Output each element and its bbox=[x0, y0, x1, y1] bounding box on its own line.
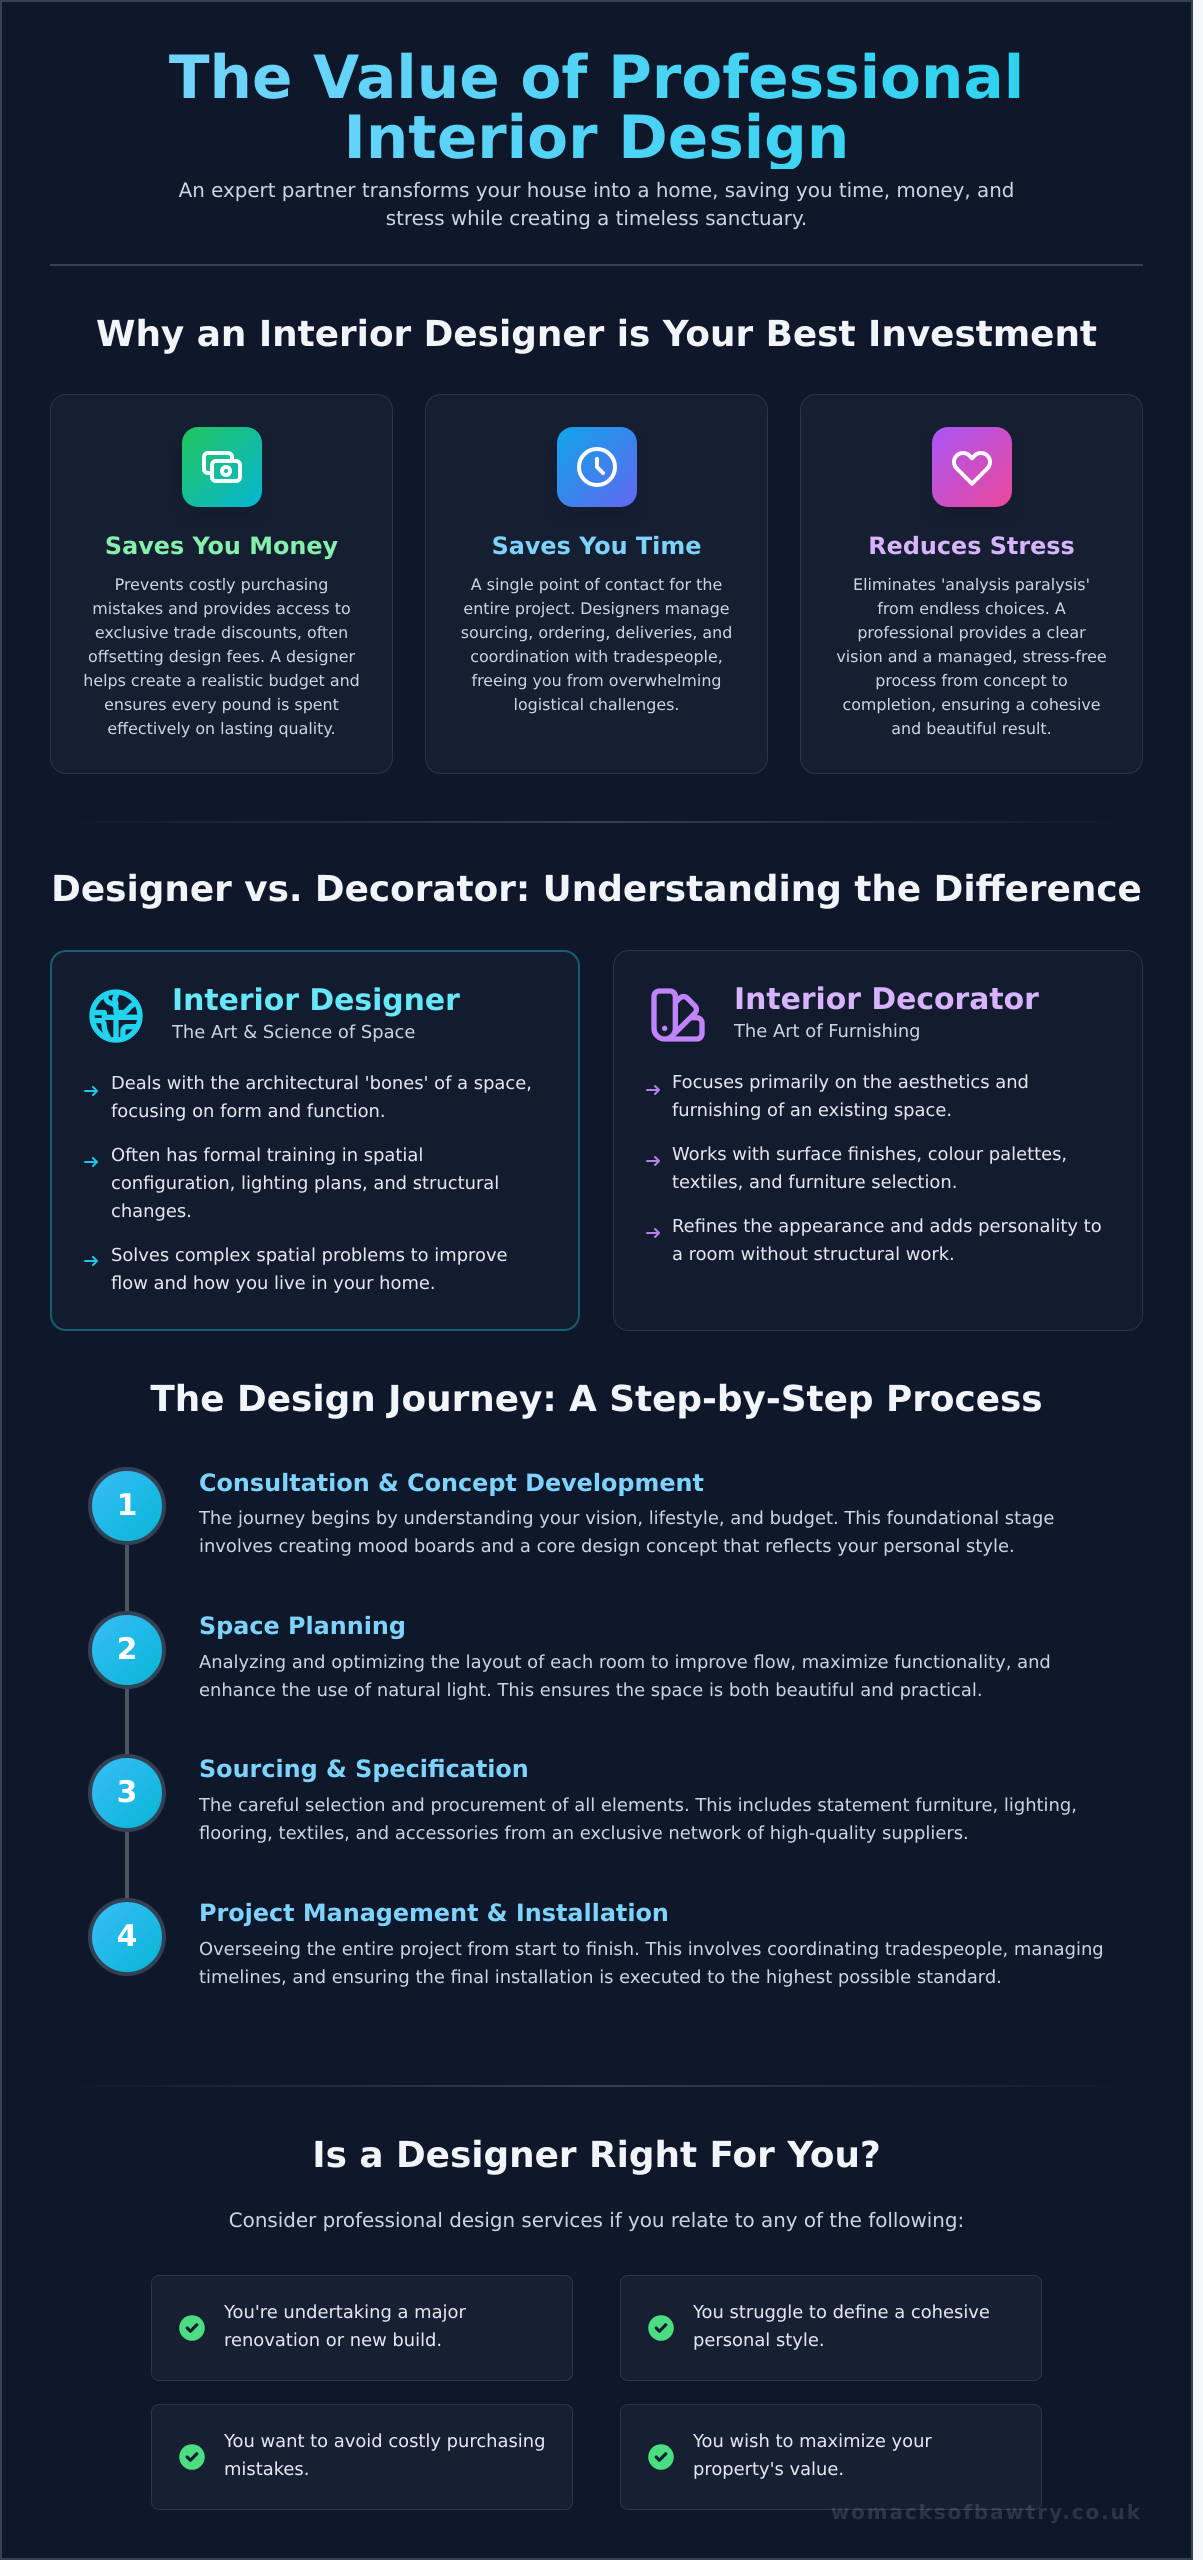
checklist item 3 bbox=[151, 2404, 573, 2510]
icon: money bbox=[182, 427, 262, 507]
step 3 text: flooring, textiles, and accessories from an exclusive network of high-quality suppliers. bbox=[199, 1823, 969, 1844]
arrow bbox=[84, 1086, 98, 1096]
arrow bbox=[84, 1157, 98, 1167]
bullet: Deals with the architectural 'bones' of a space, bbox=[111, 1073, 532, 1094]
card text: logistical challenges. bbox=[514, 695, 679, 714]
step 4 text bbox=[199, 1938, 1104, 1988]
bullet: Solves complex spatial problems to improve bbox=[111, 1245, 508, 1266]
title: The Value of Professional bbox=[169, 44, 1024, 113]
decorator subtitle: The Art of Furnishing bbox=[734, 1021, 921, 1042]
bullet bbox=[111, 1145, 499, 1222]
step 2 marker bbox=[88, 1610, 166, 1688]
bullet: textiles, and furniture selection. bbox=[672, 1172, 957, 1193]
bullet bbox=[111, 1073, 532, 1122]
step 1 text: involves creating mood boards and a core design concept that reflects your personal style. bbox=[199, 1536, 1015, 1557]
bullet: a room without structural work. bbox=[672, 1244, 955, 1264]
subtitle bbox=[178, 179, 1014, 230]
connector bbox=[125, 1832, 129, 1899]
item text: You're undertaking a major bbox=[224, 2302, 466, 2323]
connector bbox=[125, 1545, 129, 1612]
icon: check bbox=[648, 2444, 674, 2470]
icon: check bbox=[179, 2444, 205, 2470]
arrow bbox=[84, 1256, 98, 1266]
bullet: Refines the appearance and adds personality to bbox=[672, 1216, 1102, 1236]
card text bbox=[83, 575, 360, 738]
arrow bbox=[646, 1085, 660, 1095]
card heading: Reduces Stress bbox=[868, 532, 1075, 560]
bullet: configuration, lighting plans, and structural bbox=[111, 1173, 499, 1194]
card text: freeing you from overwhelming bbox=[472, 671, 721, 690]
icon: swatch bbox=[651, 988, 705, 1042]
card text: effectively on lasting quality. bbox=[107, 719, 336, 738]
watermark: womacksofbawtry.co.uk bbox=[831, 2501, 1142, 2524]
checklist item 4 bbox=[620, 2404, 1042, 2510]
card text: vision and a managed, stress-free bbox=[836, 647, 1107, 666]
designer heading: Interior Designer bbox=[172, 983, 460, 1018]
designer subtitle: The Art & Science of Space bbox=[172, 1022, 415, 1043]
card text: coordination with tradespeople, bbox=[470, 647, 723, 666]
title bbox=[50, 49, 1143, 169]
bullet: Works with surface finishes, colour palettes, bbox=[672, 1144, 1067, 1165]
bullet: changes. bbox=[111, 1201, 192, 1222]
item text: renovation or new build. bbox=[224, 2330, 442, 2351]
checklist item 1 bbox=[151, 2275, 573, 2381]
card text: Eliminates 'analysis paralysis' bbox=[853, 575, 1090, 594]
item text bbox=[693, 2431, 932, 2480]
icon: check bbox=[648, 2315, 674, 2341]
step 4 marker bbox=[88, 1898, 166, 1976]
card text: and beautiful result. bbox=[891, 719, 1052, 738]
step 2 text: enhance the use of natural light. This ensures the space is both beautiful and practical. bbox=[199, 1680, 983, 1700]
step 2 text bbox=[199, 1652, 1051, 1700]
card text: Prevents costly purchasing bbox=[115, 575, 328, 594]
step 3 text: The careful selection and procurement of all elements. This includes statement furniture, lighting, bbox=[199, 1795, 1077, 1816]
item text bbox=[224, 2431, 545, 2480]
panel: interior designer bbox=[50, 950, 580, 1331]
item text bbox=[224, 2302, 466, 2351]
card heading: Saves You Time bbox=[492, 532, 701, 560]
bullet: Often has formal training in spatial bbox=[111, 1145, 423, 1166]
panel: saves time bbox=[425, 394, 768, 774]
card text: offsetting design fees. A designer bbox=[88, 647, 355, 666]
bullet bbox=[672, 1072, 1029, 1121]
bullet bbox=[672, 1216, 1102, 1264]
step 3 title: Sourcing & Specification bbox=[199, 1755, 529, 1783]
heading: right for you: Is a Designer Right For You? bbox=[312, 2135, 881, 2176]
step 1 marker: 1 bbox=[117, 1488, 137, 1523]
card text: exclusive trade discounts, often bbox=[95, 623, 348, 642]
step 2 text: Analyzing and optimizing the layout of each room to improve flow, maximize functionality, and bbox=[199, 1652, 1051, 1672]
panel: saves money bbox=[50, 394, 393, 774]
bullet: Focuses primarily on the aesthetics and bbox=[672, 1072, 1029, 1093]
checklist item 2 bbox=[620, 2275, 1042, 2381]
step 4 marker: 4 bbox=[117, 1918, 137, 1954]
card text: professional provides a clear bbox=[857, 623, 1086, 642]
bullet: furnishing of an existing space. bbox=[672, 1100, 952, 1121]
panel: interior decorator bbox=[613, 950, 1143, 1331]
step 3 text bbox=[198, 1795, 1077, 1844]
card text: process from concept to bbox=[875, 671, 1068, 690]
bullet bbox=[111, 1245, 508, 1294]
card text: mistakes and provides access to bbox=[92, 599, 351, 618]
arrow bbox=[646, 1228, 660, 1238]
arrow bbox=[646, 1156, 660, 1166]
item text: You wish to maximize your bbox=[693, 2431, 932, 2452]
step 1 marker bbox=[88, 1467, 166, 1545]
intro text: Consider professional design services if you relate to any of the following: bbox=[229, 2209, 964, 2232]
bullet: flow and how you live in your home. bbox=[111, 1273, 436, 1294]
card text: completion, ensuring a cohesive bbox=[842, 695, 1101, 714]
card text bbox=[836, 575, 1107, 738]
item text: You struggle to define a cohesive bbox=[693, 2302, 990, 2323]
item text: You want to avoid costly purchasing bbox=[224, 2431, 545, 2452]
step 3 marker bbox=[88, 1754, 166, 1832]
item text: personal style. bbox=[693, 2330, 825, 2351]
card text: sourcing, ordering, deliveries, and bbox=[461, 623, 732, 642]
bullet list bbox=[646, 1072, 1102, 1264]
card text: A single point of contact for the bbox=[471, 575, 722, 594]
icon: globe bbox=[89, 989, 143, 1043]
step 3 marker: 3 bbox=[117, 1775, 137, 1810]
item text: property's value. bbox=[693, 2459, 844, 2480]
panel: reduces stress bbox=[800, 394, 1143, 774]
bullet bbox=[672, 1144, 1067, 1193]
icon: clock bbox=[557, 427, 637, 507]
card text bbox=[461, 575, 732, 714]
heading: designer vs decorator: Designer vs. Decorator: Understanding the Difference bbox=[51, 868, 1142, 910]
decorator heading: Interior Decorator bbox=[734, 982, 1039, 1017]
card heading: Saves You Money bbox=[105, 532, 338, 560]
step 1 title: Consultation & Concept Development bbox=[199, 1468, 704, 1496]
heading: design journey: The Design Journey: A Step-by-Step Process bbox=[150, 1379, 1043, 1420]
item text bbox=[693, 2302, 990, 2351]
subtitle: An expert partner transforms your house into a home, saving you time, money, and bbox=[179, 179, 1014, 202]
card text: helps create a realistic budget and bbox=[83, 671, 360, 690]
icon: check bbox=[179, 2315, 205, 2341]
bullet list bbox=[84, 1073, 532, 1294]
connector bbox=[125, 1688, 129, 1755]
bullet: focusing on form and function. bbox=[111, 1101, 386, 1122]
item text: mistakes. bbox=[224, 2459, 309, 2480]
step 2 title: Space Planning bbox=[199, 1612, 406, 1640]
step 1 text bbox=[198, 1508, 1054, 1557]
step 4 text: timelines, and ensuring the final installation is executed to the highest possible standard. bbox=[199, 1966, 1002, 1988]
icon: heart bbox=[932, 427, 1012, 507]
subtitle: stress while creating a timeless sanctuary. bbox=[386, 207, 807, 230]
heading: why: Why an Interior Designer is Your Best Investment bbox=[96, 314, 1097, 354]
card text: entire project. Designers manage bbox=[463, 599, 730, 618]
step 4 title: Project Management & Installation bbox=[199, 1898, 669, 1926]
step 4 text: Overseeing the entire project from start to finish. This involves coordinating tradespeople, managing bbox=[199, 1938, 1104, 1960]
step 2 marker: 2 bbox=[117, 1632, 137, 1666]
card text: from endless choices. A bbox=[877, 599, 1066, 618]
step 1 text: The journey begins by understanding your vision, lifestyle, and budget. This foundational stage bbox=[199, 1508, 1054, 1529]
card text: ensures every pound is spent bbox=[104, 695, 339, 714]
title: Interior Design bbox=[344, 104, 849, 173]
